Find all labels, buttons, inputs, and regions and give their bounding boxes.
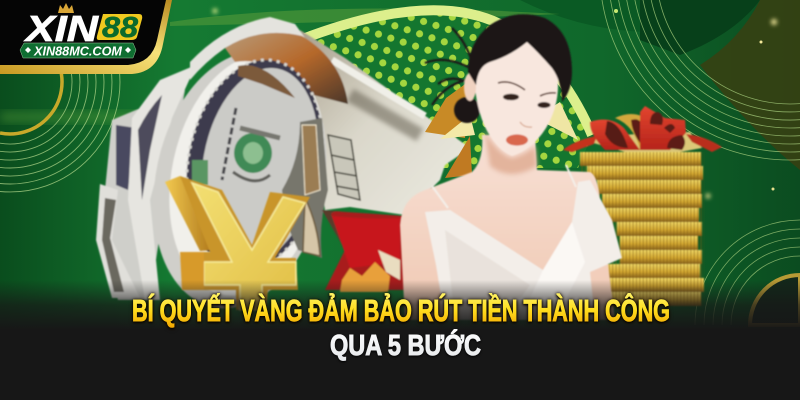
rings: left	[0, 66, 120, 192]
white dress	[425, 180, 622, 320]
dotted green circle	[300, 10, 592, 168]
title line 2: QUA 5 BƯỚC	[330, 328, 481, 362]
panel fill	[0, 0, 166, 65]
neck shadow	[484, 130, 537, 174]
gift ribbon	[563, 106, 722, 152]
straps	[432, 165, 576, 208]
eyebrows	[498, 82, 556, 96]
logo badge 88: 88	[102, 12, 139, 44]
rings: bottom right	[695, 220, 800, 325]
roll outer layers	[131, 35, 349, 325]
roll rim top	[190, 17, 305, 80]
coin stack with ribbon	[563, 106, 722, 306]
bill right edge engraving	[282, 118, 328, 258]
hair	[468, 14, 572, 102]
back bills at left	[96, 65, 196, 300]
eyes	[503, 94, 550, 108]
domain pill	[20, 43, 136, 58]
bill inner brown top	[238, 65, 295, 98]
logo word XIN: XIN	[24, 8, 99, 49]
lips	[506, 134, 528, 146]
logo panel	[0, 0, 172, 74]
red box	[322, 210, 405, 292]
ribbons behind woman	[425, 82, 578, 178]
neck and shoulders	[400, 135, 615, 320]
rings: top right	[602, 0, 800, 160]
large right bill	[300, 30, 470, 215]
dark bottom band	[0, 280, 800, 400]
face	[474, 36, 558, 156]
engraved bill band	[171, 49, 339, 281]
domain pill: XIN88MC.COM	[33, 44, 123, 58]
back hair bun	[454, 97, 480, 123]
brown curl	[225, 33, 348, 104]
coins	[580, 152, 704, 306]
money roll	[96, 17, 470, 325]
ear	[464, 73, 476, 101]
icon: gold yen symbol	[165, 176, 310, 310]
woman	[400, 14, 622, 320]
nose	[520, 122, 532, 127]
portrait seal	[192, 108, 280, 185]
icon: crown	[58, 3, 74, 13]
hair accent feathers	[425, 28, 472, 105]
panel border	[0, 0, 172, 74]
